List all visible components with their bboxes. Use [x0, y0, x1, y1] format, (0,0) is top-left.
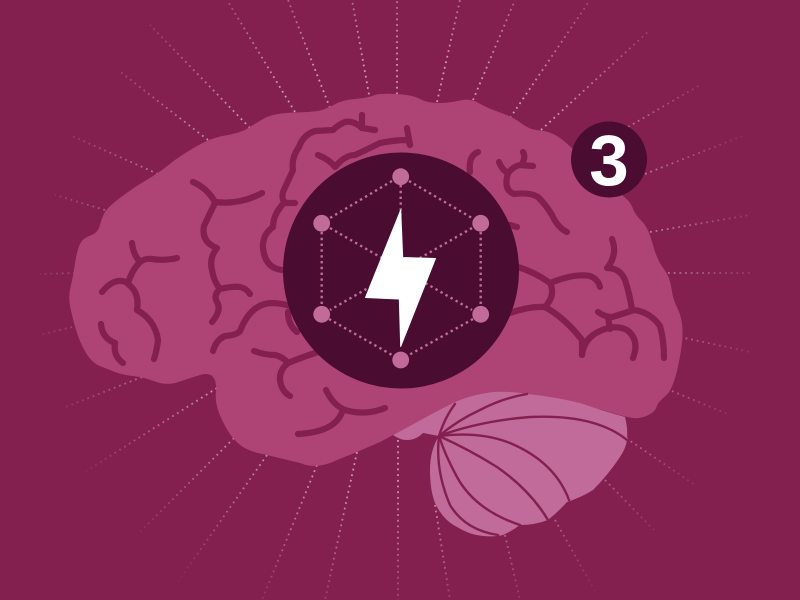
brain sulci	[101, 115, 664, 434]
central dark circle	[283, 152, 519, 388]
cerebellum folds	[438, 394, 627, 535]
dotted connections	[322, 181, 481, 355]
number badge	[571, 122, 647, 201]
brain cerebrum	[69, 94, 683, 466]
network diagram	[313, 168, 489, 368]
icon: lightning bolt	[366, 210, 436, 346]
number 3: 3	[589, 122, 629, 201]
cerebellum	[393, 392, 627, 536]
network nodes	[313, 168, 489, 368]
